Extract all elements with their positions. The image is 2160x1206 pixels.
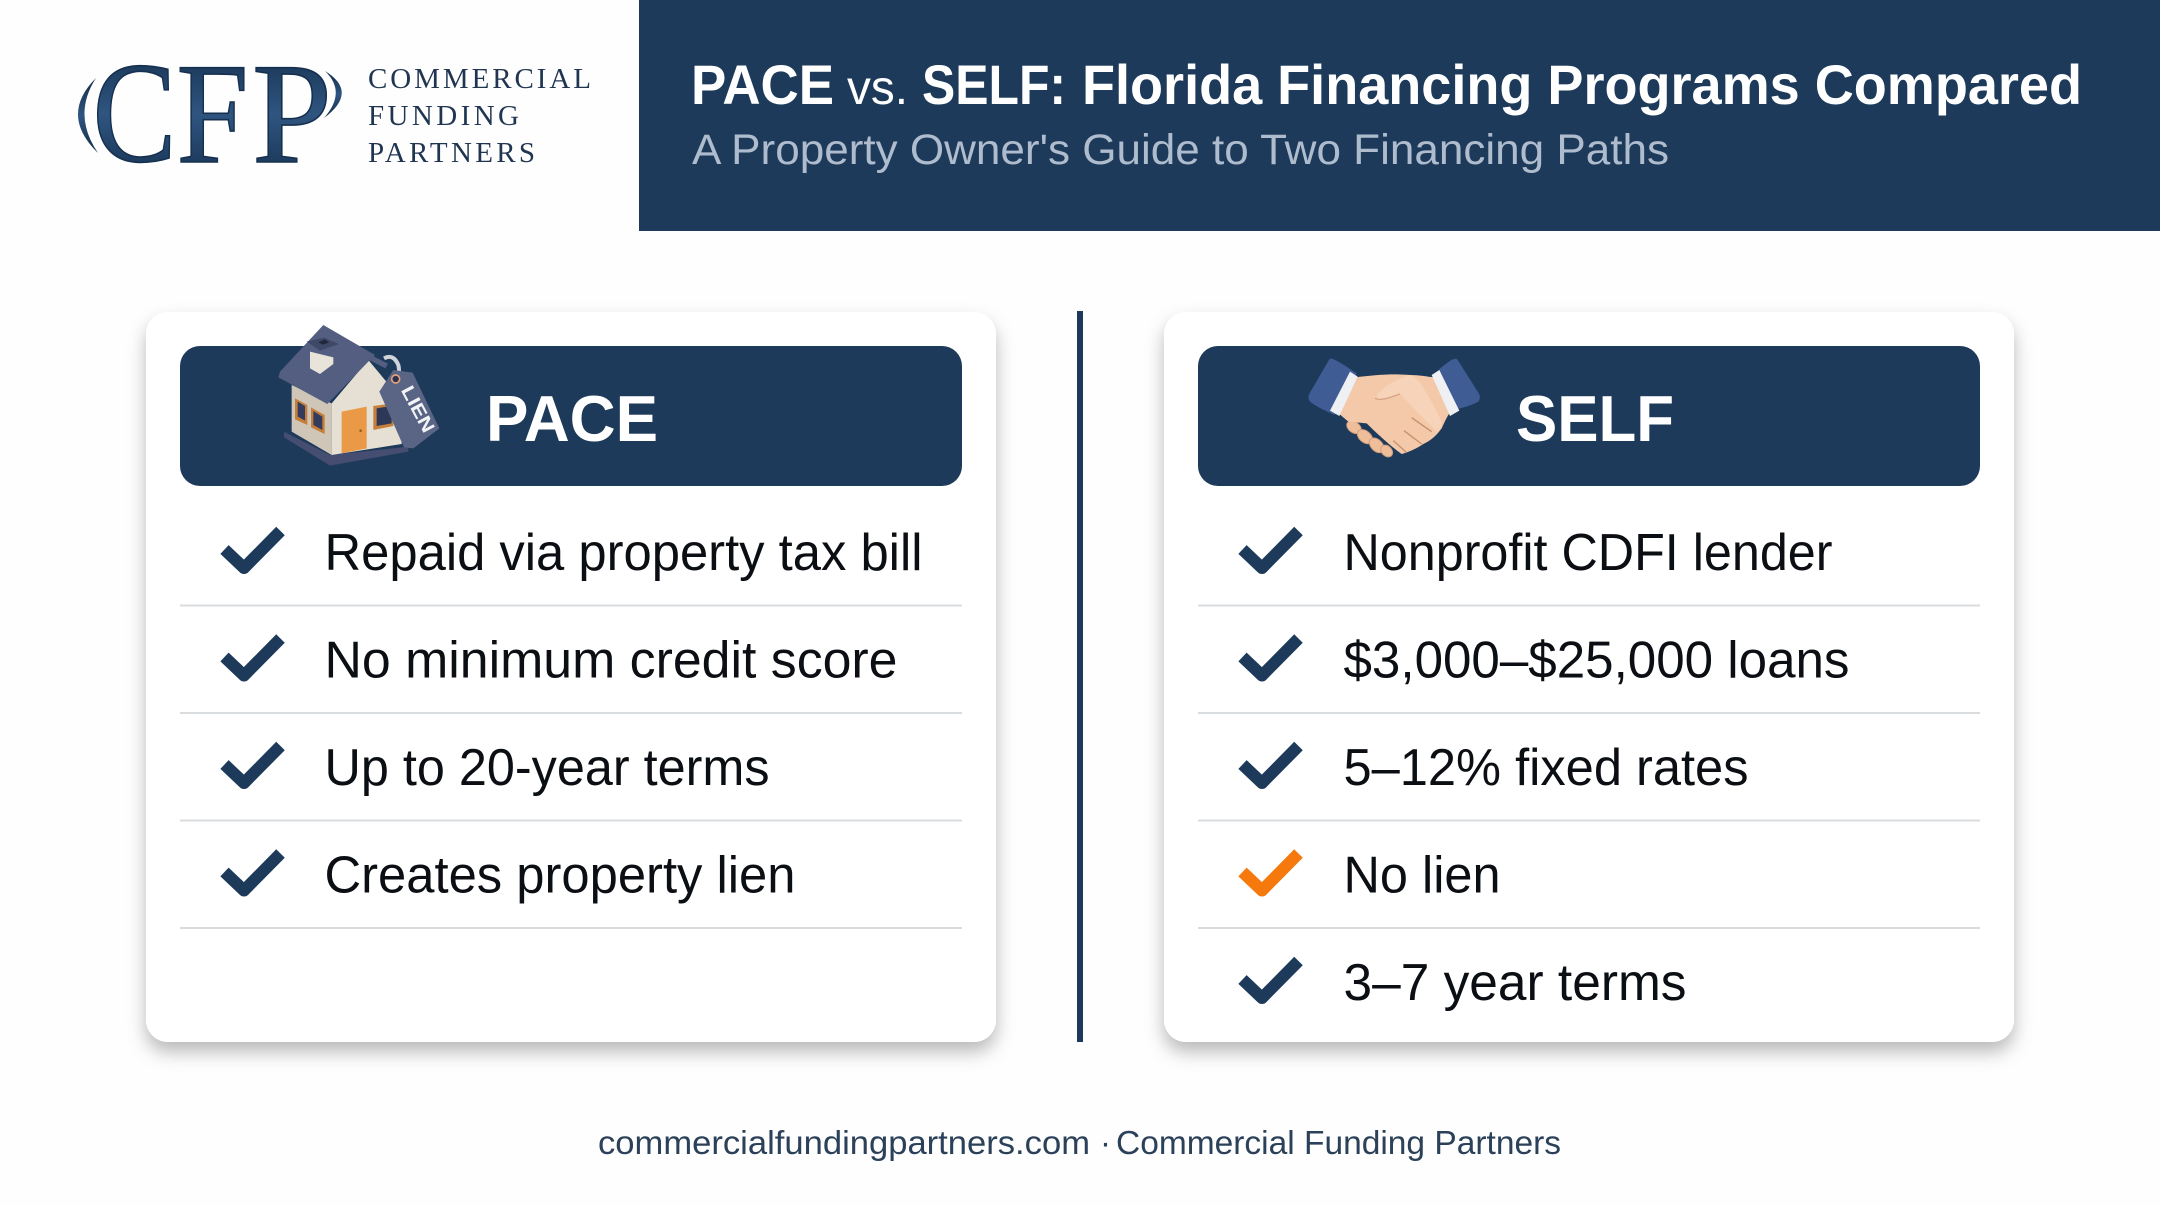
panel: SELF	[1164, 312, 2014, 1042]
row: Nonprofit CDFI lender: Nonprofit CDFI lender	[1344, 524, 1832, 582]
logo wordmark: FUNDING	[368, 100, 519, 132]
lien tag	[379, 370, 439, 448]
title: Florida Financing Programs Compared	[1082, 53, 2082, 116]
row: Up to 20-year terms: Up to 20-year terms	[324, 739, 770, 797]
logo wordmark: PARTNERS	[368, 137, 535, 169]
logo monogram CFP	[78, 34, 342, 194]
subtitle: A Property Owner's Guide to Two Financing Paths	[692, 126, 1669, 174]
center divider	[1077, 311, 1083, 1042]
row: fixed rates: 5–12% fixed rates	[1344, 739, 1748, 797]
PACE heading bar	[180, 346, 962, 486]
title: SELF:	[922, 53, 1066, 116]
row: No lien (highlighted): No lien	[1344, 846, 1500, 904]
logo wordmark: COMMERCIAL	[368, 63, 591, 95]
header banner	[639, 0, 2160, 231]
icon: house with lien tag	[278, 325, 439, 466]
footer: commercialfundingpartners.com	[598, 1124, 1090, 1161]
logo: Commercial Funding Partners	[78, 34, 591, 194]
row: year terms: 3–7 year terms	[1344, 954, 1686, 1012]
PACE heading text: PACE	[486, 382, 658, 455]
row: No minimum credit score: No minimum credit score	[324, 632, 898, 690]
footer: Commercial Funding Partners	[1116, 1124, 1561, 1161]
footer	[598, 1124, 1561, 1161]
card background	[146, 312, 996, 1042]
panel: PACE	[146, 312, 996, 1042]
card background	[1164, 312, 2014, 1042]
SELF heading bar	[1198, 346, 1980, 486]
title: PACE	[691, 53, 834, 116]
logo wordmark	[368, 63, 591, 169]
logo monogram CFP: P	[252, 35, 332, 194]
title: vs.	[847, 62, 908, 115]
logo monogram CFP: C	[92, 34, 176, 193]
row: Repaid via property tax bill: Repaid via property tax bill	[324, 524, 922, 582]
row: Creates property lien: Creates property lien	[324, 846, 796, 904]
icon: handshake	[1308, 359, 1480, 459]
logo monogram CFP: F	[176, 35, 248, 194]
row: No lien (highlighted)	[1242, 846, 1500, 904]
row: loan amount: $3,000–$25,000 loans	[1344, 632, 1850, 690]
lien tag: LIEN	[397, 382, 439, 436]
footer: ·	[1100, 1124, 1111, 1161]
SELF heading text: SELF	[1516, 382, 1674, 455]
